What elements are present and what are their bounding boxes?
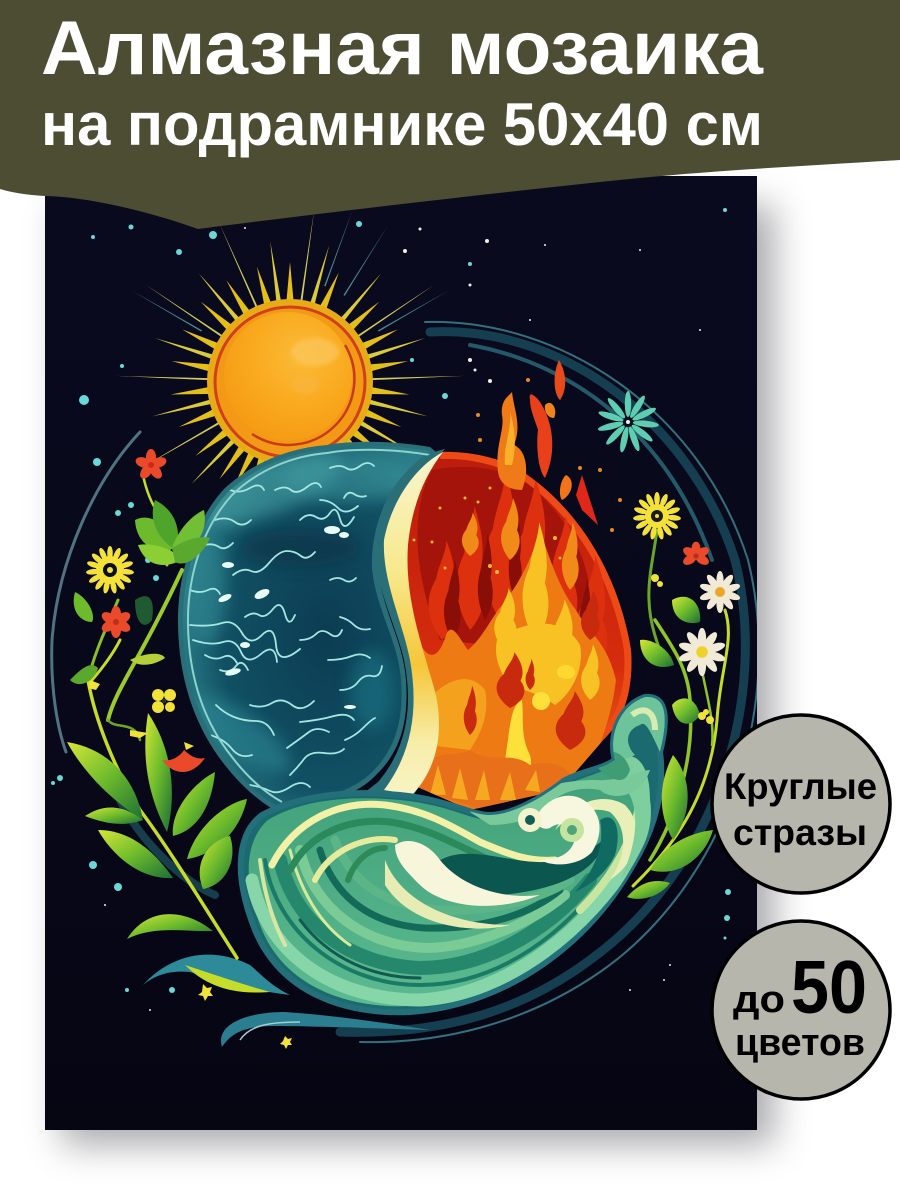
outer swirl ring <box>52 322 759 1042</box>
flower: red top <box>136 449 166 479</box>
lower left teal swirls <box>143 955 430 1047</box>
flower: yellow daisy <box>633 492 681 540</box>
wave cream streaks <box>260 804 555 945</box>
right stems <box>633 530 728 886</box>
title line 1: Алмазная мозаика <box>41 6 764 91</box>
badge text line 2: стразы <box>733 812 867 853</box>
flower: red star <box>681 542 711 567</box>
big leaves <box>67 713 247 939</box>
flower: yellow four-petal <box>152 689 176 713</box>
right curl <box>555 799 637 880</box>
fire sparks <box>412 486 562 574</box>
sun disc <box>207 299 373 465</box>
right plants <box>597 391 741 899</box>
wave white crest <box>395 841 540 906</box>
left plants <box>67 449 247 958</box>
fire half of the yin-yang <box>399 360 631 815</box>
lower yellow blossoms <box>198 984 292 1049</box>
flower: red flat <box>162 750 205 772</box>
lower orange-yellow <box>435 679 486 750</box>
left stems <box>88 475 237 958</box>
bright flame core <box>505 665 575 765</box>
flower: white daisy lower <box>678 628 726 676</box>
badge: round rhinestones <box>712 715 890 893</box>
header banner <box>0 0 900 229</box>
water waves <box>190 463 382 792</box>
wave dark belly <box>440 842 601 894</box>
water foam <box>217 526 356 709</box>
flames above the disc <box>497 360 598 525</box>
cream S-curve band <box>368 449 445 794</box>
right leaves <box>627 597 713 899</box>
flower: teal daisy <box>597 391 659 453</box>
water light rim <box>188 450 430 802</box>
sun <box>116 209 464 502</box>
flower: white daisy upper <box>699 571 741 613</box>
flower: yellow buds right <box>651 574 714 724</box>
title line 2: на подрамнике 50х40 см <box>41 91 763 158</box>
canvas shadow <box>62 205 774 1145</box>
badge text: colours: цветов <box>735 1022 865 1064</box>
star field <box>51 208 731 1011</box>
water half of the yin-yang <box>178 439 436 816</box>
green wave <box>241 697 665 1012</box>
water texture <box>186 448 411 777</box>
red flames <box>428 480 607 652</box>
fire rim <box>440 452 631 738</box>
flame gaps <box>464 590 600 750</box>
leaf cluster <box>135 500 210 565</box>
small leaves <box>70 592 165 684</box>
badge number: 50 <box>791 945 867 1029</box>
spiral crest <box>470 770 650 825</box>
flower: yellow dandelion <box>86 546 134 594</box>
flower: yellow buds <box>88 680 194 750</box>
badge text: up to: до <box>733 979 785 1021</box>
sun rays <box>116 209 464 502</box>
orange flames <box>413 530 616 810</box>
yellow tongues <box>494 522 600 705</box>
flower: red small <box>100 606 132 638</box>
badge text line 1: Круглые <box>724 766 877 807</box>
canvas painting <box>45 176 759 1130</box>
badge: up to 50 colours <box>712 921 890 1099</box>
wave lower sweeps <box>252 800 640 1000</box>
fire dark centre <box>417 467 592 650</box>
dark flame cuts <box>444 522 590 634</box>
ember base <box>420 750 570 808</box>
